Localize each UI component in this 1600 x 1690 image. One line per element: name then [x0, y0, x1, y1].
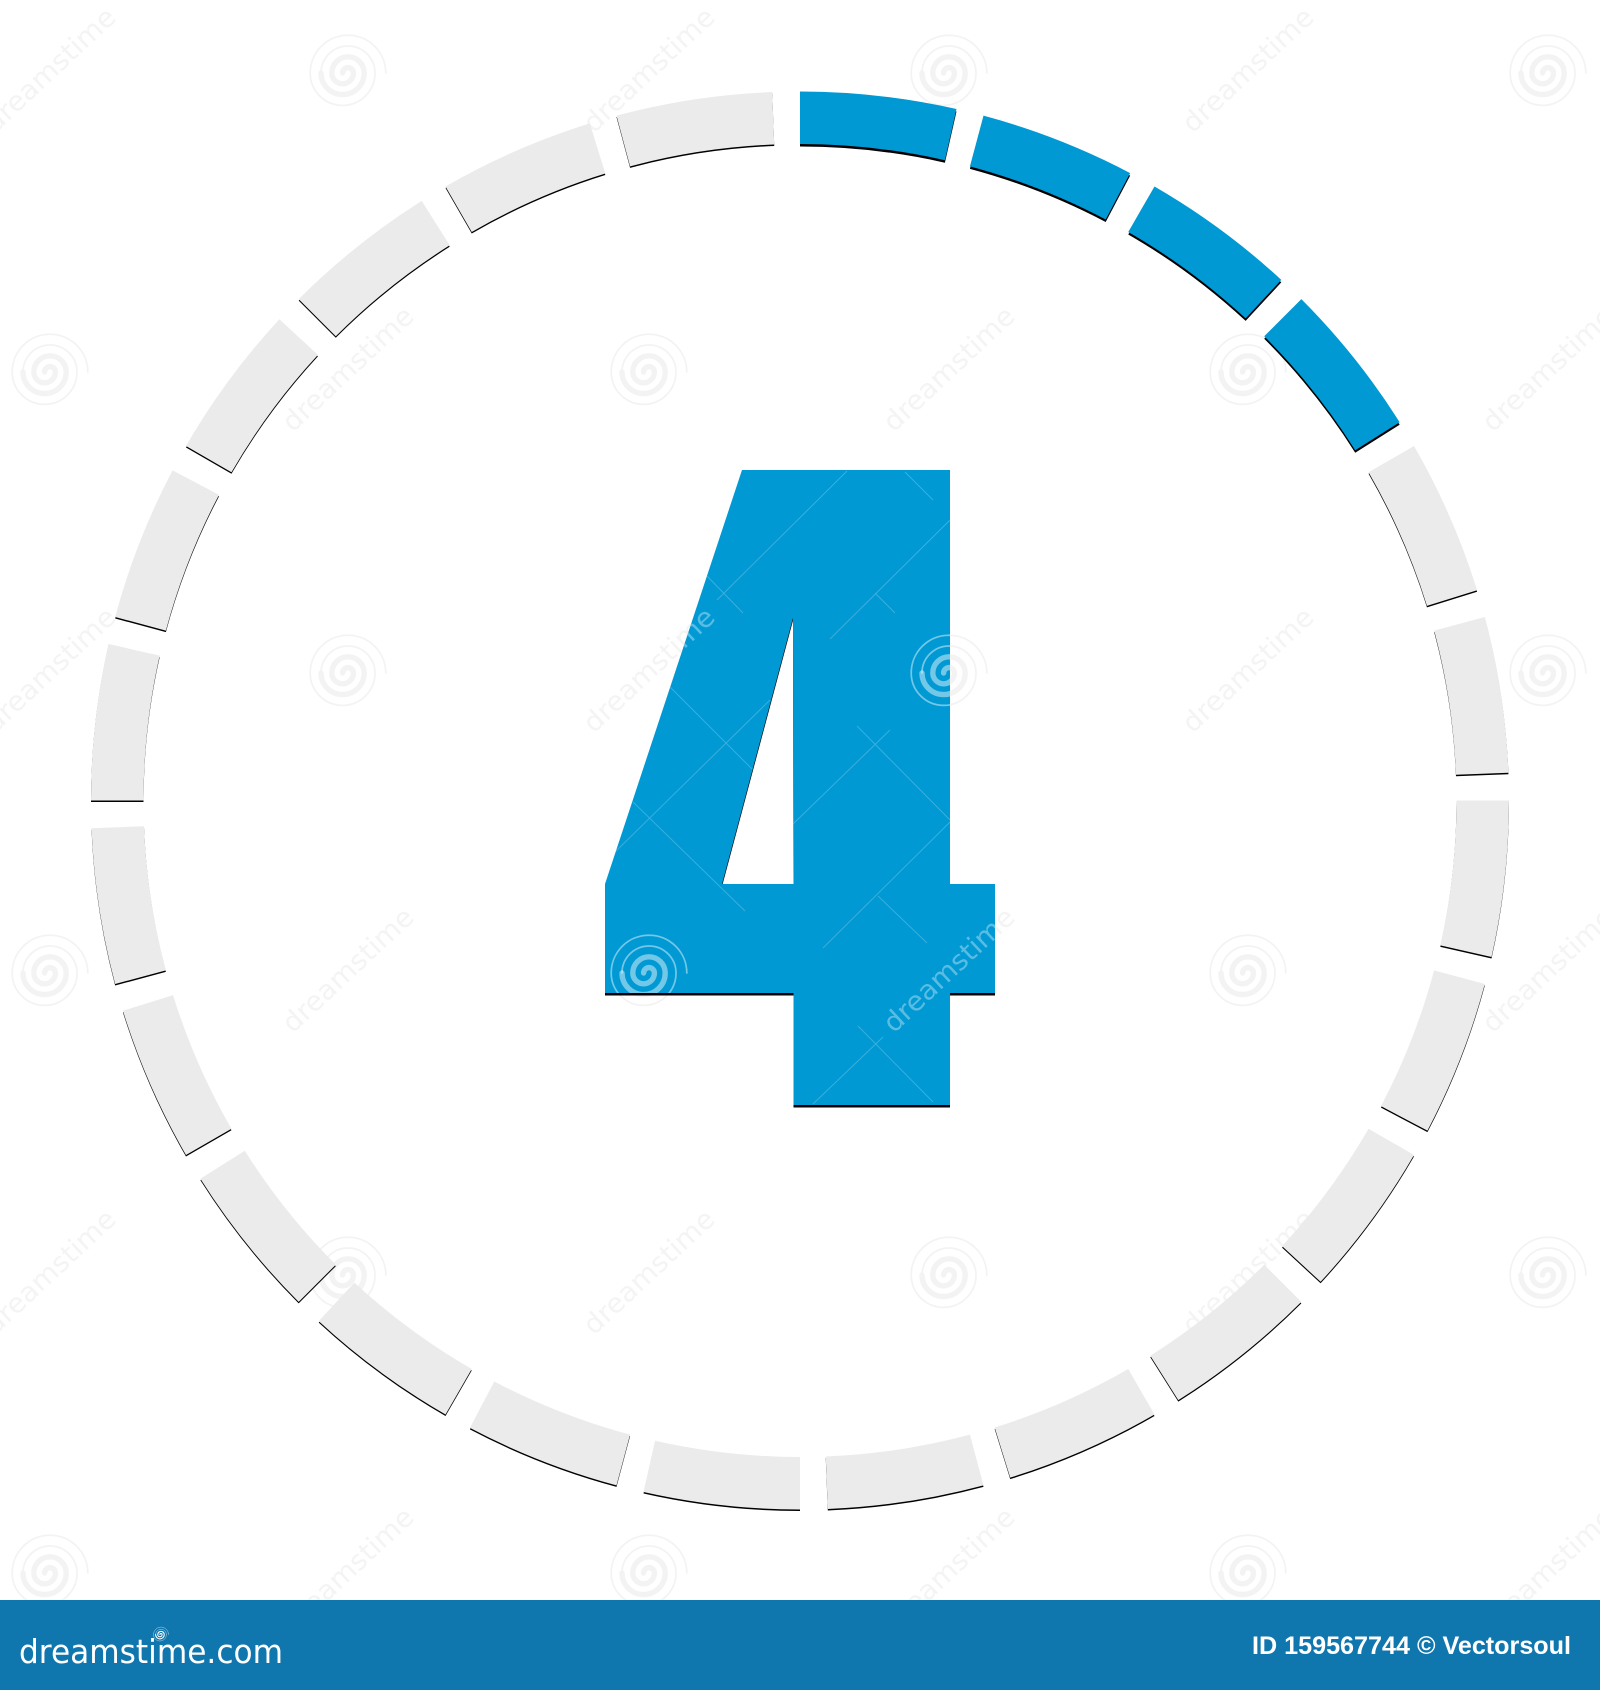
active blue segments — [800, 92, 1412, 458]
blue segment drop shadow — [800, 94, 1412, 461]
inactive grey segments — [75, 75, 1525, 1526]
watermark text: dreamstime — [276, 1502, 420, 1639]
grey segment drop shadow — [75, 77, 1525, 1527]
watermark text: dreamstime — [577, 2, 721, 139]
watermark text: dreamstime — [1176, 602, 1320, 739]
footer logo spiral icon — [153, 1627, 169, 1641]
watermark text: dreamstime — [877, 1502, 1021, 1639]
watermark text: dreamstime — [1176, 1204, 1320, 1341]
numeral fill — [605, 470, 995, 1105]
footer bar — [0, 1600, 1600, 1690]
watermark text: dreamstime — [1176, 2, 1320, 139]
image id and author credit: ID 159567744 © Vectorsoul — [1252, 1632, 1571, 1660]
watermark text: dreamstime — [577, 1204, 721, 1341]
progress ring: 24 segments — [75, 75, 1525, 1527]
watermark over numeral: dreamstime — [577, 602, 721, 739]
numeral shadow — [605, 472, 995, 1108]
watermark text: dreamstime — [276, 902, 420, 1039]
watermark text: dreamstime — [877, 301, 1021, 438]
watermark over numeral: dreamstime — [877, 902, 1021, 1039]
large numeral 4 — [605, 470, 995, 1108]
watermark text: dreamstime — [877, 902, 1021, 1039]
watermark over numeral — [610, 470, 995, 1104]
watermark text: dreamstime — [577, 602, 721, 739]
watermark text: dreamstime — [276, 301, 420, 438]
footer logo text: dreamstime.com — [19, 1632, 283, 1671]
